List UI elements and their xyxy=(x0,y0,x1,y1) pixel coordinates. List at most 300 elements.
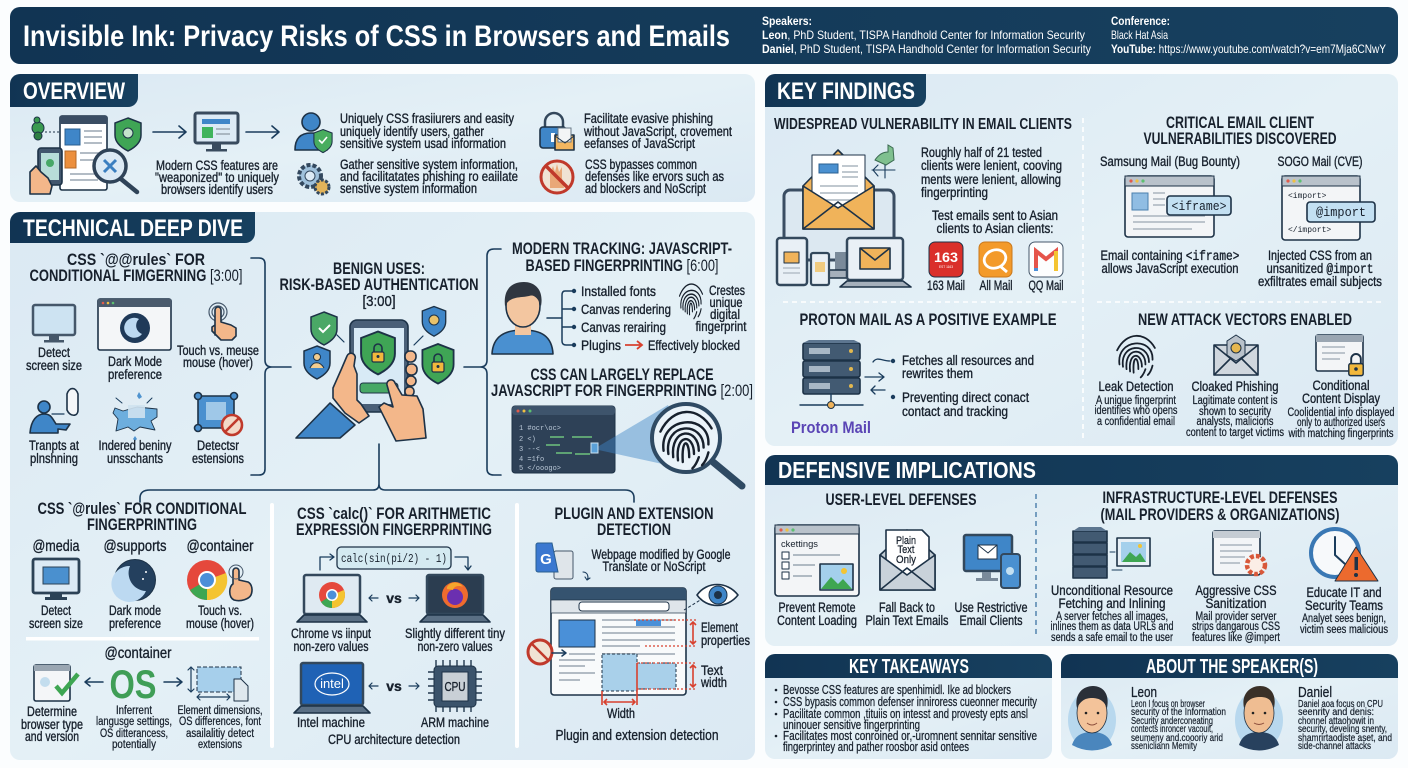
label: machines: ARM machine xyxy=(421,715,489,730)
icon: monitor xyxy=(195,113,238,152)
label: different values xyxy=(405,626,505,654)
icon: person and mask xyxy=(30,389,78,433)
heading: critical vulnerabilities: VULNERABILITIES DISCOVERED xyxy=(1144,129,1336,148)
icon: monitor and phone xyxy=(964,535,1020,588)
takeaways list: Facilitates most conroined or,-uromnent sennitar sensitive xyxy=(783,729,1037,743)
defenses text: ad blockers and NoScript xyxy=(585,181,706,196)
icon: ali mail xyxy=(979,242,1012,277)
icon: prohibited hand xyxy=(541,161,573,193)
test emails text xyxy=(932,208,1058,236)
calc formula box xyxy=(320,547,471,570)
label: mail clients: Samsung Mail (Bug Bounty) xyxy=(1100,154,1240,169)
heading: infrastructure-level defenses: INFRASTRUCTURE-LEVEL DEFENSES xyxy=(1102,488,1338,507)
icon: laptop firefox xyxy=(420,575,490,622)
text: aggressive sanitization xyxy=(1192,583,1281,644)
label: inferred language settings: langusge settings, xyxy=(96,716,172,728)
system info text: senstive system information xyxy=(340,181,477,196)
system info text: Gather sensitive system information, xyxy=(340,157,518,172)
attack vector descriptions: A unique fingerprint xyxy=(1096,395,1177,407)
identification text xyxy=(340,111,514,151)
heading: css can replace javascript xyxy=(491,365,753,400)
icon: 163 mail: 163 xyxy=(934,249,958,265)
panel: key findings xyxy=(765,74,1398,446)
icon: 163 mail: EST 1163 xyxy=(939,264,954,269)
attack vector descriptions: a confidential email xyxy=(1097,416,1175,428)
overview heading tab: OVERVIEW xyxy=(23,78,125,105)
panel: technical deep dive xyxy=(10,212,755,760)
label: detect extensions: estensions xyxy=(192,451,244,466)
heading: infrastructure-level defenses xyxy=(1100,488,1340,524)
icon: chrome and hand xyxy=(187,560,252,601)
labels: at-rule meanings: preference xyxy=(109,616,161,631)
label: vs xyxy=(369,678,419,694)
speakers heading: ABOUT THE SPEAKER(S) xyxy=(1146,656,1318,678)
attack vector descriptions xyxy=(1094,395,1394,440)
labels: at-rule meanings xyxy=(29,603,254,631)
bracket left xyxy=(251,258,291,475)
label: touch vs mouse xyxy=(177,343,259,370)
icon: code window: 2 <) xyxy=(519,436,536,444)
proton behaviours: Preventing direct conact xyxy=(902,390,1029,405)
labels: at-rule meanings: mouse (hover) xyxy=(186,616,254,631)
heading: widespread vulnerability: WIDESPREAD VULNERABILITY IN EMAIL CLIENTS xyxy=(774,116,1072,133)
icon: translate xyxy=(536,543,590,580)
label: proton mail: Proton Mail xyxy=(791,418,871,437)
label: determine browser: and version xyxy=(25,729,79,744)
text: iframe: Email containing <iframe> xyxy=(1100,248,1240,265)
heading: css rules conditional fingerprinting: FINGERPRINTING xyxy=(87,515,197,534)
panel: about the speakers xyxy=(1061,654,1398,759)
label: creates unique digital fingerprint: Crestes xyxy=(709,283,745,298)
overview summary text: browsers identify users xyxy=(161,182,273,197)
label: detect extensions: Detectsr xyxy=(197,438,239,453)
text: aggressive sanitization: strips dangarous CSS xyxy=(1192,621,1280,633)
conference info: Black Hat Asia xyxy=(1111,28,1168,42)
icon: fingerprint xyxy=(679,284,703,319)
icon: email on devices xyxy=(777,145,911,287)
label: different values: non-zero values xyxy=(418,639,493,654)
overview summary text: Modern CSS features are xyxy=(156,158,278,173)
attack vector descriptions: analysts, malicions xyxy=(1196,416,1274,428)
icon: lock and envelope xyxy=(540,113,574,150)
icon: browser with iframe: <iframe> xyxy=(1172,199,1227,214)
takeaways list xyxy=(775,683,1038,754)
text: educate teams: Educate IT and xyxy=(1306,585,1382,600)
icon: plain text envelope: Plain xyxy=(896,535,916,547)
text: daniel bio: shamrirtaodiste aset, and xyxy=(1298,733,1392,744)
icon: browser with element measurements xyxy=(551,588,686,695)
text: import: unsanitized @import xyxy=(1266,261,1374,278)
icon: magnifier with fingerprint xyxy=(591,404,742,486)
label: dark mode preference xyxy=(108,354,162,382)
test emails text: Test emails sent to Asian xyxy=(932,208,1058,223)
proton behaviours: rewrites them xyxy=(902,366,973,381)
text: unconditional fetching: Unconditional Resource xyxy=(1051,583,1173,598)
system info text xyxy=(340,157,518,196)
phishing text xyxy=(583,111,732,151)
heading: benign uses: RISK-BASED AUTHENTICATION xyxy=(280,275,478,294)
text: unconditional fetching: A server fetches all images, xyxy=(1056,611,1168,623)
label: mail clients xyxy=(1100,154,1362,169)
bracket right xyxy=(464,249,501,475)
avatar: daniel xyxy=(1235,686,1283,750)
text: educate teams: Analyet sees benign, xyxy=(1302,613,1386,625)
attack vector labels: Leak Detection xyxy=(1098,379,1174,394)
speakers info: Daniel, PhD Student, TISPA Handhold Center for Information Security xyxy=(762,42,1091,56)
label: dark mode preference: preference xyxy=(108,367,162,382)
heading: benign uses: [3:00] xyxy=(362,293,396,310)
title: Invisible Ink: Privacy Risks of CSS in Browsers and Emails xyxy=(23,20,730,53)
arrow xyxy=(85,678,103,686)
labels: at-rule meanings: screen size xyxy=(29,616,83,631)
label: webpage modified xyxy=(592,547,730,574)
label: mail icons: All Mail xyxy=(980,278,1012,293)
text: daniel bio: side-channel attacks xyxy=(1298,741,1371,752)
attack vector labels: Content Display xyxy=(1302,391,1380,406)
text: import: Injected CSS from an xyxy=(1268,248,1372,263)
label: creates unique digital fingerprint: unique xyxy=(710,295,742,310)
takeaways list: CSS bypasis common defenser inniroress cueonner mecurity xyxy=(783,695,1038,709)
heading: css calc xyxy=(296,504,492,539)
icon: monitor xyxy=(33,559,79,600)
heading: css can replace javascript: CSS CAN LARGELY REPLACE xyxy=(530,365,714,384)
takeaways list: uninouer sensitive fingerprinting xyxy=(783,718,920,732)
icon: intel laptop xyxy=(294,663,370,713)
text: unconditional fetching: inlines them as data URLs and xyxy=(1050,621,1174,633)
label: tranpts at phishing: plnshning xyxy=(30,451,78,466)
icon: moon xyxy=(111,560,156,602)
labels: at-rules: @media xyxy=(32,538,80,555)
finding text xyxy=(921,145,1062,200)
heading: modern tracking: MODERN TRACKING: JAVASCRIPT- xyxy=(512,239,732,258)
icon: splash xyxy=(113,392,157,441)
label: mail icons xyxy=(927,278,1064,293)
label: container: @container xyxy=(104,645,172,662)
text: unconditional fetching: sends a safe email to the user xyxy=(1051,632,1173,644)
labels: at-rules: @container xyxy=(186,538,254,555)
user-level labels: Use Restrictive xyxy=(954,600,1028,615)
attack vector labels: Cloaked Phishing xyxy=(1192,379,1278,394)
icon: browser with check xyxy=(34,665,78,701)
text: leon bio: seumeny and.coooriy arid xyxy=(1131,733,1223,744)
heading: conditional fingerning: CSS `@@rules` FOR xyxy=(67,250,205,269)
icon: server xyxy=(800,340,863,408)
label: vs: vs xyxy=(386,590,402,606)
icon: person avatar xyxy=(492,282,553,354)
icon: user with shield xyxy=(295,113,332,153)
finding text: Roughly half of 21 tested xyxy=(921,145,1042,160)
takeaways heading xyxy=(765,654,1052,678)
label: detect screen size xyxy=(26,345,82,373)
attack vector labels: Conditional xyxy=(1312,378,1370,393)
label: width: Width xyxy=(607,706,635,721)
heading: css can replace javascript: JAVASCRIPT FOR FINGERPRINTING [2:00] xyxy=(491,381,753,400)
finding text: ments were lenient, allowing xyxy=(921,172,1061,187)
text: leon bio: Security anderconeating xyxy=(1131,716,1213,727)
text: daniel bio: Daniel xyxy=(1298,684,1332,701)
labels: at-rule meanings: Touch vs. xyxy=(198,603,242,618)
defensive heading bar xyxy=(765,455,1398,485)
label: creates unique digital fingerprint: fingerprint xyxy=(696,319,747,334)
text: import xyxy=(1258,248,1382,289)
tracking features tree: Plugins xyxy=(581,338,621,353)
label: inferred language settings xyxy=(96,705,172,751)
arrow xyxy=(246,126,279,138)
icon: settings browser xyxy=(775,525,859,596)
user-level labels: Prevent Remote xyxy=(778,600,856,615)
labels: at-rule meanings: Detect xyxy=(41,603,71,618)
heading: modern tracking xyxy=(512,239,732,275)
heading: plugin and extension detection: PLUGIN AND EXTENSION xyxy=(554,504,714,523)
text: leon bio: ssenicliann Memity xyxy=(1131,741,1197,752)
panel: defensive implications xyxy=(765,455,1398,646)
takeaways heading: KEY TAKEAWAYS xyxy=(849,656,969,678)
text: leon bio xyxy=(1131,684,1226,752)
label: detect extensions xyxy=(192,438,244,466)
text: daniel bio xyxy=(1298,684,1392,752)
attack vector labels xyxy=(1098,378,1380,406)
tracking features tree xyxy=(547,284,740,353)
key findings heading tab xyxy=(765,74,926,107)
label: chrome values: Chrome vs iinput xyxy=(291,626,371,641)
test emails text: clients to Asian clients: xyxy=(936,221,1054,236)
label: determine browser xyxy=(21,704,83,744)
label: OS: OS xyxy=(110,663,156,707)
label: detect screen size: Detect xyxy=(38,345,70,360)
heading: css rules conditional fingerprinting: CSS `@rules` FOR CONDITIONAL xyxy=(38,499,246,518)
label: chrome values xyxy=(291,626,371,654)
label: mail icons: 163 Mail xyxy=(927,278,965,293)
overview summary text: "weaponized" to uniquely xyxy=(155,170,279,185)
label: vs: vs xyxy=(386,678,402,694)
text: iframe xyxy=(1100,248,1240,276)
label: element dimensions: asailalitiy detect xyxy=(186,728,255,740)
attack vector descriptions: shown to security xyxy=(1199,406,1271,418)
text: daniel bio: security, develing snenty, xyxy=(1298,724,1387,735)
heading: critical vulnerabilities xyxy=(1144,113,1336,148)
label: element dimensions: Element dimensions, xyxy=(178,705,262,717)
label: machines xyxy=(297,715,489,730)
takeaways list: Bevosse CSS features are spenhimidl. Ike ad blockers xyxy=(783,683,1011,697)
defenses text: defenses like ervors such as xyxy=(585,169,724,184)
speakers heading xyxy=(1061,654,1398,678)
label: inferred language settings: OS ditterancess, xyxy=(100,728,168,740)
icon: browser with import xyxy=(1282,176,1375,240)
phishing text: without JavaScript, crovement xyxy=(583,124,732,139)
label: text width: width xyxy=(700,675,727,690)
text: daniel bio: seenrity and denis: xyxy=(1298,707,1374,718)
overview summary text xyxy=(155,158,279,197)
proton behaviours: Fetches all resources and xyxy=(902,353,1034,368)
label: touch vs mouse: Touch vs. meuse xyxy=(177,343,259,358)
label: webpage modified: Translate or NoScript xyxy=(602,559,706,574)
icon: browser with import: </import> xyxy=(1288,226,1331,235)
icon: gears xyxy=(299,165,329,194)
icon: browser fingerprint scene xyxy=(30,116,141,194)
text: unconditional fetching xyxy=(1050,583,1174,644)
text: aggressive sanitization: Mail provider server xyxy=(1196,611,1277,623)
heading: modern tracking: BASED FINGERPRINTING [6:00] xyxy=(526,256,718,275)
user-level labels: Fall Back to xyxy=(879,600,935,615)
text: daniel bio: chonnel attaohowit in xyxy=(1298,716,1374,727)
arrow xyxy=(164,678,182,686)
identification text: Uniquely CSS frasiiurers and easity xyxy=(340,111,514,126)
attack vector descriptions: content to target victims xyxy=(1186,427,1284,439)
icon: code window xyxy=(512,406,615,473)
speakers info xyxy=(762,14,1091,56)
label: text width xyxy=(700,663,727,690)
takeaways list: fingerprintey and pather roosbor asid ontees xyxy=(783,740,969,754)
label: element dimensions xyxy=(178,705,262,751)
label: touch vs mouse: mouse (hover) xyxy=(183,355,253,370)
label: determine browser: Determine xyxy=(27,704,77,719)
icon: code window: 1 #ocr\oc> xyxy=(519,425,561,433)
red measurement marks xyxy=(602,620,697,705)
label: indered beniny: unsschants xyxy=(107,451,163,466)
icon: code window: 5 </ooogo> xyxy=(519,465,561,473)
overview heading tab xyxy=(10,74,138,107)
label: chrome values: non-zero values xyxy=(294,639,369,654)
label: tranpts at phishing: Tranpts at xyxy=(29,438,79,453)
icon: intel laptop: intel xyxy=(320,676,344,691)
label: inferred language settings: potentially xyxy=(112,739,156,751)
phishing text: Facilitate evasive phishing xyxy=(584,111,713,126)
label: tranpts at phishing xyxy=(29,438,79,466)
arrow xyxy=(153,126,186,138)
icon: laptop chrome xyxy=(297,575,367,622)
label: mail icons: QQ Mail xyxy=(1028,278,1064,293)
icon: touch hand xyxy=(209,303,236,340)
label: vs xyxy=(369,590,419,606)
user-level labels xyxy=(777,600,1028,628)
label: indered beniny: Indered beniny xyxy=(98,438,172,453)
icon: plain text envelope: Text xyxy=(898,544,914,556)
icon: eye xyxy=(684,584,738,610)
panel: key takeaways xyxy=(765,654,1052,759)
text: unconditional fetching: Fetching and Inlining xyxy=(1058,596,1166,611)
technical deep dive heading tab: TECHNICAL DEEP DIVE xyxy=(23,215,243,242)
text: leon bio: security of the Information xyxy=(1131,707,1226,718)
label: plugin and extension detection: Plugin and extension detection xyxy=(556,727,718,744)
icon: plain text envelope: Only xyxy=(896,554,916,566)
finding text: clients were lenient, cooving xyxy=(921,158,1062,173)
tracking features tree: Installed fonts xyxy=(581,284,656,299)
heading: benign uses xyxy=(280,259,478,310)
conference info xyxy=(1111,14,1386,56)
proton behaviours xyxy=(865,353,1034,419)
text: educate teams: Security Teams xyxy=(1305,598,1383,613)
text: aggressive sanitization: Sanitization xyxy=(1206,596,1266,611)
text: daniel bio: Daniel aoa focus on CPU xyxy=(1298,699,1383,710)
labels: at-rules xyxy=(32,538,254,555)
conference info: Conference: xyxy=(1111,14,1170,28)
user-level labels: Plain Text Emails xyxy=(866,613,949,628)
label: different values: Slightly different tiny xyxy=(405,626,505,641)
label: element properties: properties xyxy=(701,633,750,648)
tracking features tree: Canvas rendering xyxy=(581,302,671,317)
calc formula box: calc(sin(pi/2) - 1) xyxy=(341,552,447,566)
icon: browser with import: @import xyxy=(1316,205,1366,220)
heading: css calc: EXPRESSION FINGERPRINTING xyxy=(296,520,492,539)
icon: fingerprint xyxy=(1117,336,1155,377)
heading: plugin and extension detection: DETECTION xyxy=(597,520,671,539)
icon: browser with gear xyxy=(1213,531,1265,575)
defenses text xyxy=(585,157,724,196)
label: element properties: Element xyxy=(701,620,738,635)
icon: monitor detect screen size xyxy=(33,305,75,342)
heading: critical vulnerabilities: CRITICAL EMAIL CLIENT xyxy=(1166,113,1314,132)
icon: puzzle with prohibit xyxy=(194,392,242,435)
text: educate teams xyxy=(1300,585,1388,636)
icon: element dimensions xyxy=(188,667,248,701)
icon: code window: 4 =1fo xyxy=(519,456,544,464)
finding text: fingerprinting xyxy=(921,185,988,200)
text: aggressive sanitization: Aggressive CSS xyxy=(1196,583,1276,598)
identification text: uniquely identify users, gather xyxy=(340,124,484,139)
text: iframe: allows JavaScript execution xyxy=(1102,261,1238,276)
text: educate teams: victim sees malicious xyxy=(1300,624,1388,636)
panel: overview xyxy=(10,74,755,202)
proton behaviours: contact and tracking xyxy=(902,404,1008,419)
icon: cloaked envelope xyxy=(1214,335,1258,375)
label: element dimensions: extensions xyxy=(198,739,242,751)
label: creates unique digital fingerprint: digital xyxy=(710,307,740,322)
header banner xyxy=(10,7,1398,64)
phishing text: eefanses of JavaScript xyxy=(584,136,695,151)
label: dark mode preference: Dark Mode xyxy=(108,354,162,369)
icon: qq mail xyxy=(1029,242,1063,277)
icon: settings browser: ckettings xyxy=(781,539,819,549)
icon: servers and image xyxy=(1073,527,1150,578)
text: leon bio: Leon xyxy=(1131,684,1157,701)
icon: cpu chip xyxy=(428,660,482,712)
icon: dark mode browser xyxy=(98,299,171,350)
takeaways list: Pacilitate common ,tituiis on intesst and provesty epts ansl xyxy=(783,707,1028,721)
labels: at-rules: @supports xyxy=(104,538,166,555)
label: determine browser: browser type xyxy=(21,717,83,732)
icon: phone in hands with shields xyxy=(296,306,454,441)
label: machines: Intel machine xyxy=(297,715,365,730)
speakers info: Speakers: xyxy=(762,14,812,28)
attack vector descriptions: identifies who opens xyxy=(1094,405,1178,417)
defensive heading bar: DEFENSIVE IMPLICATIONS xyxy=(778,457,1036,483)
label: cpu architecture detection: CPU architecture detection xyxy=(328,732,460,747)
icon: cpu chip: CPU xyxy=(444,680,466,694)
icon: plain text envelope xyxy=(880,530,935,590)
icon: browser with iframe xyxy=(1125,176,1231,237)
key findings heading tab: KEY FINDINGS xyxy=(777,78,915,105)
label: mail clients: SOGO Mail (CVE) xyxy=(1278,154,1362,169)
speakers info: Leon, PhD Student, TISPA Handhold Center for Information Security xyxy=(762,28,1085,42)
icon: code window: 3 --< xyxy=(519,446,540,454)
heading: conditional fingerning xyxy=(30,250,243,285)
text: leon bio: contects inroncer vacouit, xyxy=(1131,724,1213,735)
icon: clock and warning xyxy=(1311,529,1378,581)
label: indered beniny xyxy=(98,438,172,466)
bracket below xyxy=(140,444,634,502)
heading: plugin and extension detection xyxy=(554,504,714,539)
label: creates unique digital fingerprint xyxy=(696,283,747,334)
heading: css rules conditional fingerprinting xyxy=(38,499,246,534)
labels: at-rule meanings: Dark mode xyxy=(109,603,161,618)
tracking features tree: Canvas rerairing xyxy=(581,320,666,335)
icon: prohibited extension xyxy=(528,640,566,664)
identification text: sensitive system usad information xyxy=(340,136,506,151)
label: element properties xyxy=(701,620,750,648)
heading: css calc: CSS `calc()` FOR ARITHMETIC xyxy=(297,504,491,523)
text: leon bio: Leon I focus on browser xyxy=(1131,699,1205,710)
icon: browser with lock xyxy=(1316,335,1363,376)
